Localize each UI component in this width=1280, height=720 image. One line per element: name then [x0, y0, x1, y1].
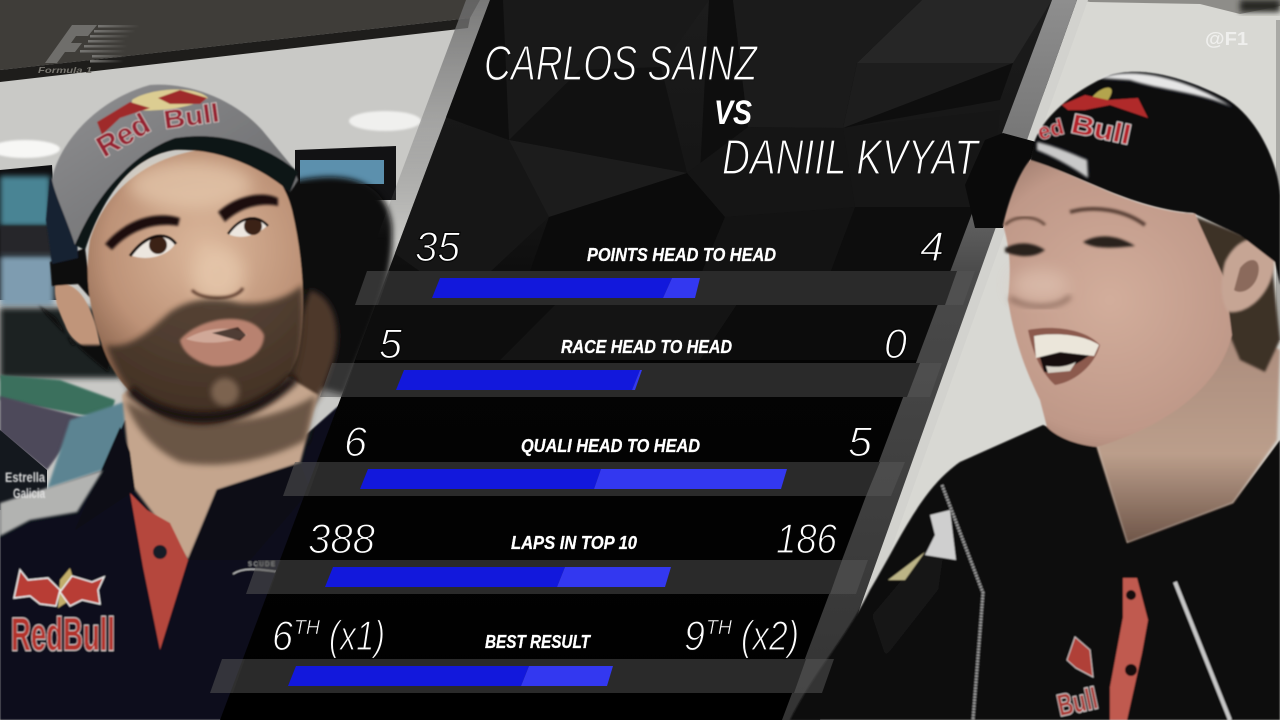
- eyes: [1005, 243, 1045, 256]
- brim mesh highlight: [1037, 142, 1088, 178]
- forehead highlight: [128, 161, 252, 209]
- nose: [192, 247, 244, 303]
- nose: [1010, 296, 1070, 306]
- band: [320, 363, 942, 397]
- ear: [1222, 239, 1274, 312]
- title: Daniil Kvyat: DANIIL KVYAT: [722, 131, 980, 185]
- background photo: right: [800, 0, 1280, 720]
- jacket: [790, 425, 1280, 720]
- left translucent strip: [376, 0, 490, 240]
- value right: TH: [706, 617, 733, 639]
- left eye: [130, 236, 176, 258]
- title: Carlos Sainz: CARLOS SAINZ: [484, 37, 759, 91]
- band: [210, 659, 834, 693]
- title: vs: VS: [714, 94, 752, 132]
- band: [355, 271, 975, 305]
- cap logo: Red Bull: Red: [91, 107, 156, 164]
- value left: TH: [294, 617, 321, 639]
- mouth: [1028, 328, 1100, 385]
- shirt: [0, 400, 345, 720]
- brim shadow wedge: [965, 133, 1040, 228]
- red placket: [1110, 578, 1148, 720]
- value right: (x2): [741, 612, 799, 659]
- cap logo: Red Bull: [91, 90, 221, 164]
- shirt logo: Red Bull: [11, 568, 115, 660]
- value right: 9: [684, 612, 705, 659]
- stat row: race head to head: [320, 320, 942, 397]
- bar: [432, 278, 700, 298]
- stat label: POINTS HEAD TO HEAD: [587, 245, 776, 265]
- sponsor patch: [5, 469, 45, 501]
- chin shadow: [130, 378, 295, 417]
- back ear: [275, 290, 337, 415]
- sponsor patch: Galicia: [13, 485, 45, 501]
- cap grey crown: [52, 85, 298, 245]
- jacket logo detail: [888, 552, 925, 580]
- face: [1003, 160, 1232, 447]
- beard: [106, 285, 303, 425]
- value left: 6: [344, 418, 368, 465]
- cap: [1030, 72, 1280, 285]
- bar: [288, 666, 613, 686]
- stat label: LAPS IN TOP 10: [511, 533, 637, 553]
- speed lines: [80, 25, 140, 62]
- cap crown and brim: [1030, 72, 1280, 285]
- shirt logo: Red Bull: RedBull: [11, 608, 115, 660]
- value left: 5: [379, 320, 403, 367]
- value left: 388: [308, 515, 376, 562]
- bar: [325, 567, 671, 587]
- value left: 35: [415, 223, 461, 270]
- bar: [360, 469, 787, 489]
- jacket zipper right: [1175, 582, 1230, 720]
- value right: [684, 612, 799, 659]
- hair: [1185, 213, 1280, 372]
- stat row: quali head to head: [283, 418, 905, 496]
- handle: @F1: @F1: [1205, 29, 1248, 49]
- chin patch: [211, 378, 239, 406]
- teal seat: [47, 400, 130, 490]
- stat label: QUALI HEAD TO HEAD: [521, 436, 700, 456]
- cap back: [46, 178, 78, 264]
- cap: ed: [1035, 114, 1066, 145]
- low-poly facets: [330, 0, 1052, 360]
- stat row: best result: [210, 612, 834, 693]
- red placket: [130, 493, 188, 650]
- stat row: points head to head: [355, 223, 975, 305]
- F mark: [45, 25, 97, 63]
- lighter outer strip: [820, 0, 1088, 720]
- neck: [122, 360, 318, 560]
- value left: (x1): [329, 612, 385, 659]
- neck stubble: [125, 395, 316, 465]
- face: [88, 148, 303, 425]
- sponsor patch: Estrella: [5, 469, 45, 485]
- ear: [55, 284, 100, 348]
- panel base: [220, 0, 1052, 720]
- right translucent strip: [782, 0, 1077, 720]
- photo: Daniil Kvyat: [790, 72, 1280, 720]
- value right: 4: [920, 223, 944, 270]
- collar left: [75, 427, 135, 530]
- highlight on cap: [1100, 73, 1232, 107]
- value right: 0: [884, 320, 908, 367]
- value left: [272, 612, 385, 659]
- hair behind head: [265, 177, 392, 395]
- mouth: [180, 319, 264, 366]
- right eye: [228, 217, 268, 237]
- value right: 5: [848, 418, 873, 465]
- shirt text: SCUDE: [248, 562, 277, 568]
- logo: [1090, 88, 1112, 106]
- stat row: laps in top 10: [246, 515, 868, 594]
- band: [283, 462, 905, 496]
- collar right: [188, 463, 310, 560]
- neck: [1097, 320, 1280, 543]
- eyebrows: [105, 215, 180, 250]
- sponsor stripes: [0, 470, 103, 536]
- stat label: RACE HEAD TO HEAD: [561, 337, 732, 357]
- logo: Formula 1: Formula 1: [38, 65, 92, 75]
- stat label: BEST RESULT: [485, 632, 592, 652]
- cap brim: [75, 136, 298, 250]
- value right: 186: [776, 515, 838, 562]
- hair side: [50, 248, 92, 300]
- cap: Bull: [1069, 109, 1134, 150]
- background photo: left: [0, 0, 640, 720]
- bar: [396, 370, 642, 390]
- logo: Formula 1: [38, 25, 140, 75]
- photo: Carlos Sainz: [0, 85, 392, 720]
- cap logo: Red Bull: Bull: [162, 97, 221, 135]
- diagonal centre panel: [220, 0, 1077, 720]
- shirt logo: [1055, 637, 1101, 720]
- value left: 6: [272, 612, 294, 659]
- band: [246, 560, 868, 594]
- jacket zipper left: [942, 485, 983, 720]
